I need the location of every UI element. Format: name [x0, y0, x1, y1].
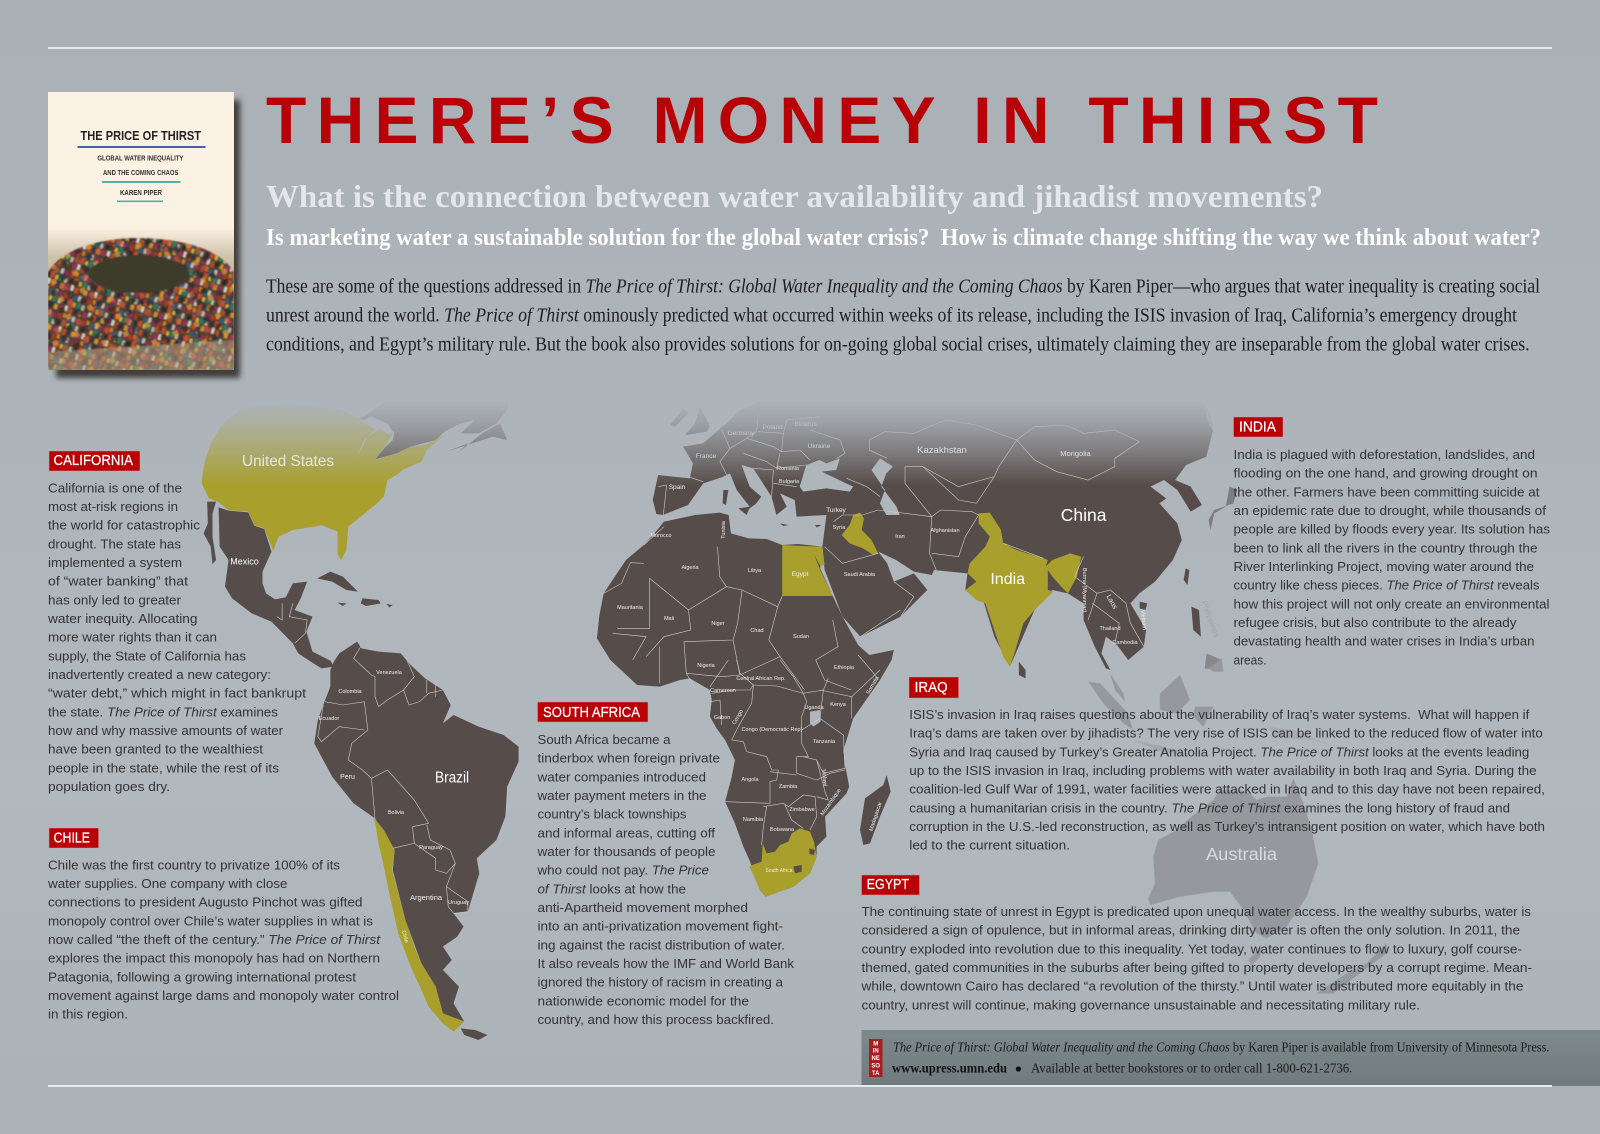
California text: supply, the State of California has [48, 648, 246, 663]
map: country labels: Zimbabwe [789, 807, 815, 813]
South Africa text: South Africa became a [538, 732, 671, 747]
map: country labels: Namibia [743, 817, 764, 823]
Chile text: Chile was the first country to privatize 100% of its [48, 857, 341, 872]
Japan [1209, 487, 1237, 530]
map: country labels: Peru [340, 774, 355, 781]
icon: Minnesota press logo: TA [872, 1071, 880, 1077]
California text: most at-risk regions in [48, 499, 178, 514]
Swaziland [809, 848, 815, 855]
South Africa text: who could not pay. The Price [536, 863, 709, 878]
Chile text: connections to president Augusto Pinchot was gifted [48, 895, 362, 910]
South Africa text: water companies introduced [536, 769, 706, 784]
India text: areas. [1234, 652, 1266, 667]
map: country labels: Zambia [779, 784, 798, 790]
India badge: INDIA [1239, 420, 1276, 436]
map: country labels: Tunisia [721, 520, 727, 539]
map: Southern Africa [710, 660, 891, 897]
Baja California [204, 502, 216, 564]
Lesotho [793, 865, 802, 873]
California text [47, 480, 306, 794]
Iraq text: coalition-led Gulf War of 1991, water facilities were attacked in Iraq and to this day have not been repaired, [909, 782, 1545, 797]
India highlighted [965, 513, 1081, 667]
map: country labels: Philippines [1200, 599, 1221, 639]
Sulawesi [1193, 707, 1213, 727]
Iraq text: Syria and Iraq caused by Turkey’s Greater Anatolia Project. The Price of Thirst looks at the events leading [909, 744, 1529, 759]
map: country labels: Sudan [793, 634, 809, 640]
Iraq text: corruption in the U.S.-led reconstruction, as well as Turkey’s intransigent position on water, which have both [909, 819, 1545, 834]
Tierra del Fuego [461, 1028, 487, 1040]
map: country labels: United States [242, 453, 334, 470]
California text: inadvertently created a new category: [48, 667, 271, 682]
icon: Minnesota press logo [869, 1039, 882, 1077]
India text: people are killed by floods every year. Its solution has [1234, 522, 1551, 537]
California text: people in the state, while the rest of its [48, 760, 280, 775]
Sumatra [1088, 682, 1133, 730]
panel: Iraq [909, 677, 1545, 853]
India text: the other. Farmers have been committing suicide at [1234, 484, 1540, 499]
publisher line one: The Price of Thirst: Global Water Inequality and the Coming Chaos by Karen Piper is available from University of Minnesota Press. [893, 1041, 1550, 1056]
Chile badge: CHILE [54, 831, 90, 847]
map: country labels: Niger [711, 621, 725, 627]
India text: been to link all the rivers in the country through the [1234, 540, 1538, 555]
Egypt text: The continuing state of unrest in Egypt is predicated upon unequal water access. In the wealthy suburbs, water is [862, 904, 1532, 919]
map: country labels: Bolivia [388, 810, 405, 816]
southern African borders [710, 660, 880, 845]
map: country labels: Mauritania [617, 605, 644, 611]
Philippines south [1205, 653, 1222, 670]
California text: “water debt,” which might in fact bankrupt [48, 686, 306, 701]
icon: Minnesota press logo: M [873, 1042, 878, 1048]
map: country labels: Syria [833, 525, 846, 531]
bottom rule [48, 1085, 1552, 1087]
map: country labels: Chad [750, 628, 764, 634]
California text: the world for catastrophic [48, 518, 201, 533]
Iraq badge [909, 677, 959, 698]
South Africa text: ignored the history of racism in creating a [538, 975, 784, 990]
California text: drought. The state has [48, 536, 182, 551]
map: country labels: Ecuador [319, 716, 339, 722]
California text: implemented a system [48, 555, 182, 570]
footer publisher band [862, 1030, 1600, 1086]
book cover: GLOBAL WATER INEQUALITY [97, 154, 183, 163]
South Africa text: tinderbox when foreign private [538, 751, 720, 766]
book cover: THE PRICE OF THIRST [80, 128, 201, 143]
India badge [1234, 417, 1283, 437]
publisher url: www.upress.umn.edu [892, 1062, 1007, 1077]
map: country labels: Saudi Arabia [844, 572, 876, 578]
South and Central American borders [277, 603, 468, 913]
map: country labels: Congo (Democratic Rep) [742, 727, 803, 733]
map: East Asian islands [1140, 400, 1237, 670]
California text: population goes dry. [48, 779, 170, 794]
Sri Lanka [1019, 662, 1026, 678]
subheading question one: What is the connection between water availability and jihadist movements? [266, 178, 1323, 214]
California text: how and why massive amounts of water [48, 723, 284, 738]
map: country labels: Tanzania [813, 739, 836, 745]
Iraq text [909, 707, 1545, 853]
map: country labels: Ethiopia [834, 665, 855, 671]
Madagascar [860, 775, 891, 845]
South Africa highlighted [749, 828, 817, 897]
South Africa text: country, and how this process backfired. [538, 1012, 774, 1027]
map: country labels: Gabon [714, 715, 730, 721]
Chile highlighted [374, 818, 464, 1032]
Malay Peninsula [1110, 673, 1125, 702]
South Africa text: water payment meters in the [536, 788, 706, 803]
Hispaniola [361, 598, 381, 606]
South America [314, 642, 519, 1022]
Australia [1148, 778, 1318, 938]
map: country labels: Afghanistan [930, 528, 960, 534]
intro paragraph: These are some of the questions addressed in The Price of Thirst: Global Water Inequality and the Coming Chaos by Karen Piper—who argues that water inequality is creating social [266, 277, 1541, 298]
icon: Minnesota press logo: IN [873, 1048, 879, 1054]
map: country labels: Bulgaria [779, 479, 800, 485]
Chile text: monopoly control over Chile’s water supplies in what is [48, 913, 374, 928]
panel: Egypt [860, 875, 1532, 1012]
intro paragraph [266, 277, 1541, 356]
intro paragraph: unrest around the world. The Price of Thirst ominously predicted what occurred within weeks of its release, including the ISIS invasion of Iraq, California’s emergency drought [266, 306, 1518, 327]
Great Britain [685, 407, 710, 435]
European borders [658, 415, 880, 515]
Egypt text: country exploded into revolution due to this inequality. Yet today, water continues to flow to luxury, golf course- [862, 941, 1522, 956]
map: country labels: Mali [664, 616, 674, 622]
map: country labels: Central African Rep. [736, 676, 786, 682]
map: Eurasia and north Africa [597, 393, 1213, 897]
panel: South Africa [536, 702, 794, 1027]
map: country labels: Malawi [820, 769, 828, 787]
Chile text [47, 857, 399, 1022]
California text: more water rights than it can [48, 630, 217, 645]
map: country labels: Kazakhstan [917, 445, 967, 456]
map: country labels: Congo [731, 709, 745, 726]
map: country labels: Romania [777, 466, 800, 472]
book cover: KAREN PIPER [120, 188, 162, 197]
South Africa badge: SOUTH AFRICA [543, 705, 640, 721]
Chile text: water supplies. One company with close [47, 876, 287, 891]
map: country labels: Mexico [230, 556, 259, 566]
map: country labels: Angola [741, 777, 759, 783]
Chile text: now called “the theft of the century.” The Price of Thirst [48, 932, 381, 947]
Iraq text: ISIS’s invasion in Iraq raises questions about the vulnerability of Iraq’s water systems. What will happen if [909, 707, 1530, 722]
map: country labels: South Africa [766, 868, 793, 874]
Tasmania [1248, 947, 1262, 965]
Iraq highlighted [842, 513, 878, 555]
map: country labels: Brazil [435, 770, 469, 787]
Chile badge [49, 828, 99, 848]
Mediterranean islands [723, 490, 822, 527]
top rule [48, 47, 1552, 49]
South Africa text: country’s black townships [538, 807, 687, 822]
India text: how this project will not only create an environmental [1234, 596, 1550, 611]
icon: Minnesota press logo: NE [872, 1056, 880, 1062]
subheading question two: Is marketing water a sustainable solution for the global water crisis? How is climate change shifting the way we think about water? [266, 225, 1541, 251]
bullet [1016, 1066, 1021, 1072]
map: country labels: Mozambique [820, 788, 843, 817]
United States highlighted [202, 403, 446, 560]
South Africa text [536, 732, 794, 1027]
California badge: CALIFORNIA [54, 453, 133, 469]
South Africa text: water for thousands of people [536, 844, 716, 859]
Iraq text: led to the current situation. [909, 838, 1070, 853]
South Africa text: of Thirst looks at how the [538, 881, 686, 896]
panel: Chile [47, 828, 399, 1022]
Chile text: explores the impact this monopoly has had on Northern [48, 951, 380, 966]
Iraq badge: IRAQ [915, 680, 948, 696]
map: country labels: Thailand [1099, 626, 1121, 632]
map: country labels: Botswana [770, 827, 795, 833]
California text: of “water banking” that [48, 574, 188, 589]
book cover [48, 92, 240, 378]
India text: River Interlinking Project, moving water around the [1234, 559, 1534, 574]
California text: has only led to greater [48, 592, 182, 607]
publisher ordering line: Available at better bookstores or to order call 1-800-621-2736. [1031, 1062, 1352, 1077]
map: country labels: Ukraine [808, 443, 831, 450]
Puerto Rico [386, 604, 393, 607]
map: country labels: Germany [728, 430, 755, 437]
map: country labels: India [990, 571, 1025, 588]
India text: India is plagued with deforestation, landslides, and [1234, 447, 1535, 462]
map: country labels: Colombia [338, 689, 363, 695]
Chile text: movement against large dams and monopoly water control [48, 988, 399, 1003]
world map [202, 393, 1387, 1040]
Egypt text: country, unrest will continue, making governance unsustainable and necessitating military rule. [862, 997, 1420, 1012]
title: THERE’S MONEY IN THIRST [266, 83, 1378, 157]
South Africa text: nationwide economic model for the [538, 993, 749, 1008]
map: country labels: Morocco [650, 533, 672, 539]
Chile text: in this region. [48, 1007, 128, 1022]
India text [1234, 447, 1551, 667]
Egypt text [860, 904, 1532, 1012]
map: country labels: China [1061, 505, 1107, 525]
map: country labels: Burma (Myanmar) [1081, 568, 1087, 612]
Taiwan [1184, 568, 1189, 585]
Egypt text: while, downtown Cairo has declared “a revolution of the thirsty.” Until water is distributed more equitably in the [860, 979, 1524, 994]
Borneo [1160, 675, 1190, 713]
California text: California is one of the [48, 480, 182, 495]
Egypt badge: EGYPT [867, 877, 909, 893]
India text: an epidemic rate due to drought, while thousands of [1234, 503, 1546, 518]
book cover: AND THE COMING CHAOS [103, 168, 178, 177]
California text: the state. The Price of Thirst examines [48, 704, 279, 719]
South Africa text: and informal areas, cutting off [538, 825, 715, 840]
map: country labels: Cameroon [710, 688, 736, 694]
India text: devastating health and water crises in India’s urban [1234, 634, 1534, 649]
Atlantic Canada islands [446, 423, 507, 453]
map: country labels: Nigeria [697, 663, 716, 669]
icon: Minnesota press logo: SO [871, 1064, 880, 1070]
map: country labels: Chile [400, 930, 409, 944]
South Africa text: ing against the racist distribution of water. [538, 937, 785, 952]
map: country labels: Venezuela [376, 670, 403, 676]
Jamaica [337, 603, 346, 606]
New Zealand [1317, 943, 1387, 993]
Black Sea [800, 458, 853, 492]
Africa [597, 513, 894, 897]
Egypt text: considered a sign of opulence, but in informal areas, drinking dirty water is often the only solution. In 2011, the [862, 923, 1520, 938]
India text: flooding on the one hand, and growing drought on [1234, 466, 1538, 481]
map: country labels: Argentina [410, 893, 443, 902]
map: country labels: Mongolia [1060, 449, 1092, 458]
Great Lakes [357, 417, 393, 457]
map: country labels: Kenya [830, 702, 847, 708]
map: country labels: Libya [748, 568, 762, 574]
panel: India [1234, 417, 1551, 667]
New Guinea [1267, 727, 1333, 747]
Hainan [1140, 602, 1147, 610]
Egypt text: themed, gated communities in the suburbs after being gifted to property developers by a corrupt regime. Mean- [862, 960, 1532, 975]
Egypt badge [862, 875, 920, 895]
Mexico and Central America [219, 507, 334, 668]
map: country labels: Laos [1104, 594, 1118, 611]
map: country labels: Uruguay [448, 900, 469, 906]
map: country labels: Algeria [681, 565, 699, 571]
Sakhalin [1207, 416, 1214, 432]
Egypt highlighted [782, 545, 833, 596]
Iraq text: Iraq’s dams are taken over by jihadists? The very rise of ISIS can be linked to the reduced flow of water into [909, 726, 1543, 741]
map: country labels: Spain [669, 484, 686, 491]
map: Europe islands and borders [658, 407, 880, 527]
California text: have been granted to the wealthiest [48, 742, 263, 757]
panel: California [47, 451, 306, 794]
Lake Victoria [810, 710, 821, 727]
Eurasia landmass [653, 393, 1213, 670]
map: country labels [230, 421, 1221, 944]
Iraq text: up to the ISIS invasion in Iraq, including problems with water availability in both Iraq and Syria. During the [909, 763, 1537, 778]
India text: refugee crisis, but also contribute to the already [1234, 615, 1517, 630]
Chile text: Patagonia, following a growing international protest [48, 969, 356, 984]
California text: water inequity. Allocating [47, 611, 198, 626]
map: country labels: Madagascar [869, 801, 884, 832]
Canada [361, 408, 507, 460]
map: country labels: Turkey [826, 507, 847, 514]
Iraq text: causing a humanitarian crisis in the country. The Price of Thirst examines the long history of fraud and [909, 800, 1510, 815]
Caspian Sea [872, 458, 900, 515]
South Africa text: into an anti-privatization movement fight- [538, 919, 783, 934]
map: country labels: Iran [895, 534, 905, 540]
Cuba [317, 572, 358, 592]
map: country labels: France [696, 453, 716, 460]
map: Americas [202, 397, 519, 1040]
map: country labels: Paraguay [419, 845, 443, 851]
map: country labels: Uganda [804, 705, 825, 711]
South Africa text: anti-Apartheid movement morphed [538, 900, 748, 915]
map: Southeast Asia and Oceania faded [1088, 658, 1387, 993]
map: country labels: Belarus [795, 421, 817, 428]
Asian and north African borders [604, 420, 1144, 690]
map: country labels: Egypt [792, 571, 809, 578]
label: Australia: Australia [1206, 844, 1277, 864]
Java [1133, 740, 1190, 755]
map: country labels: Poland [763, 424, 783, 431]
map: country labels: Somalia [866, 675, 881, 696]
Mindanao [1208, 658, 1223, 672]
Ireland [670, 408, 688, 427]
South Africa text: It also reveals how the IMF and World Bank [538, 956, 794, 971]
map: country labels: Vietnam [1139, 610, 1147, 631]
Philippines north [1191, 607, 1201, 637]
India text: country like chess pieces. The Price of Thirst reveals [1234, 578, 1540, 593]
map: country labels: Cambodia [1112, 640, 1138, 646]
